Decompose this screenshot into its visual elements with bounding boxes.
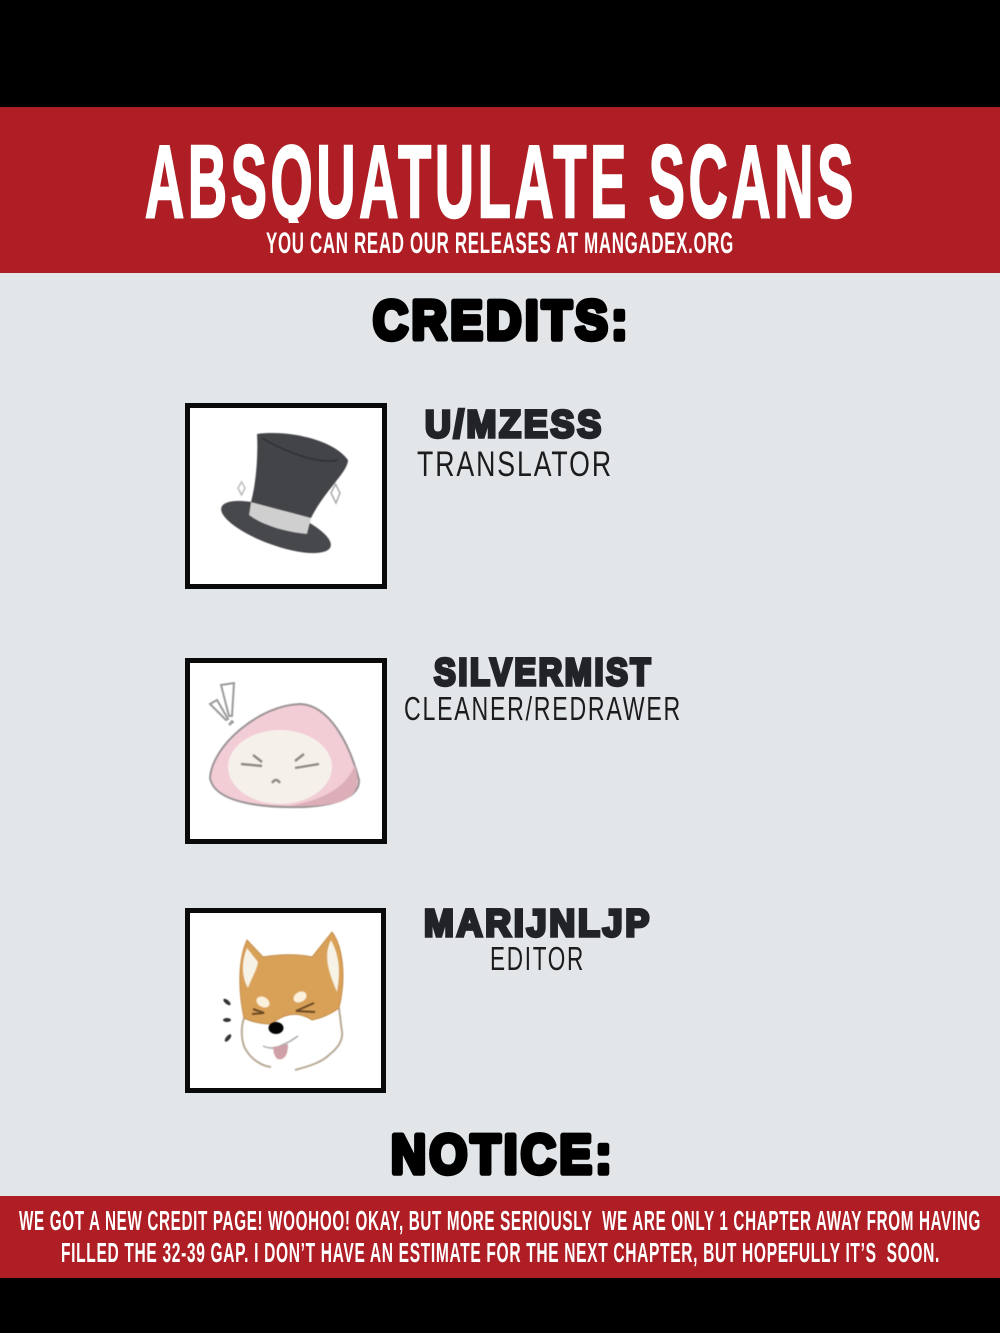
name: silvermist: SILVERMIST (434, 652, 653, 694)
panel: red header banner (0, 107, 1000, 273)
role: editor: EDITOR (490, 940, 585, 977)
icon: shiba dog (222, 932, 343, 1070)
name: u/mzess: U/MZESS (425, 404, 604, 446)
name: marijnljp: MARIJNLJP (424, 903, 652, 945)
panel: light grey content area (0, 273, 1000, 1196)
heading: credits: CREDITS: (373, 289, 631, 351)
avatar frame: top hat (188, 406, 384, 586)
role: cleaner/redrawer: CLEANER/REDRAWER (404, 690, 682, 727)
heading: notice: NOTICE: (391, 1123, 615, 1185)
avatar frame: mochi (188, 660, 384, 842)
icon: pink mochi (210, 683, 359, 807)
panel: red notice banner (0, 1196, 1000, 1278)
icon: top hat (215, 433, 348, 564)
role: translator: TRANSLATOR (417, 445, 613, 484)
avatar frame: shiba (188, 910, 384, 1090)
panel: credit u/mzess (188, 404, 613, 586)
panel: credit silvermist (188, 652, 682, 842)
panel: credit marijnljp (188, 903, 652, 1090)
